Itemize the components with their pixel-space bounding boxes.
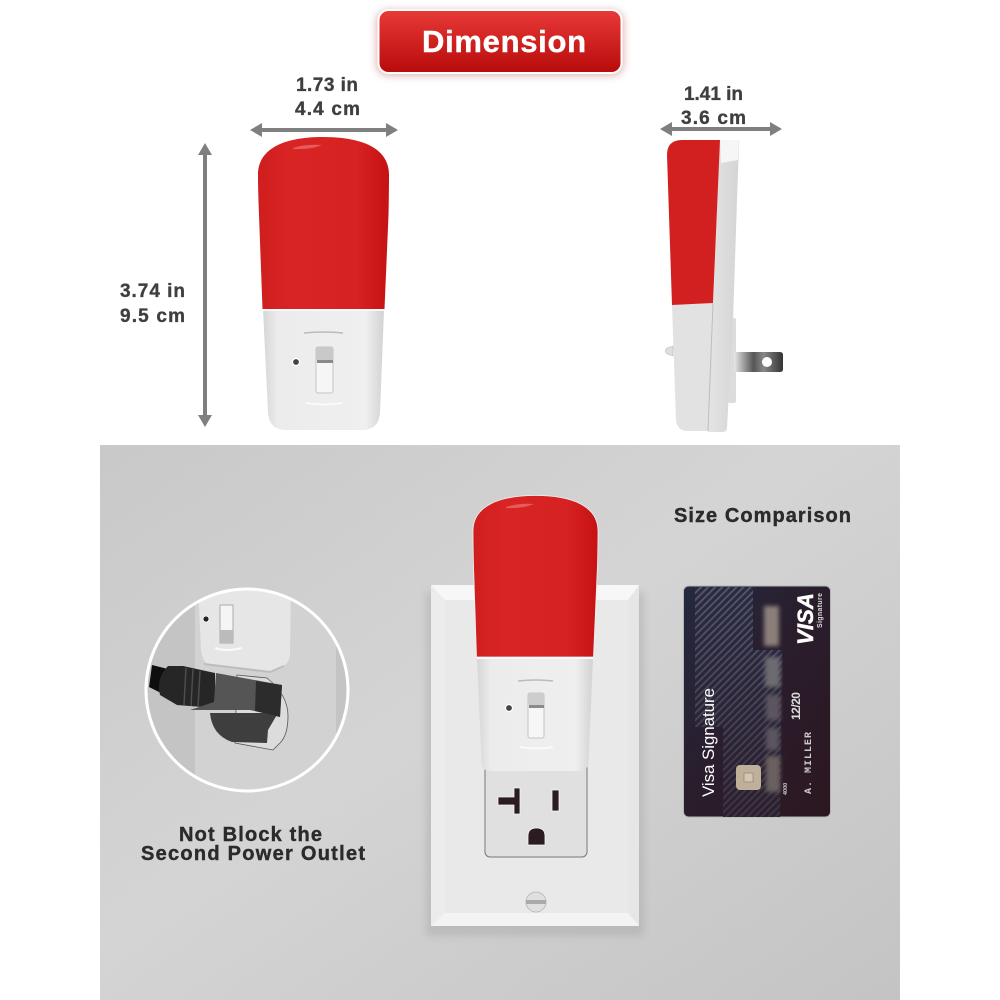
blurred card number <box>764 606 780 792</box>
card chip <box>736 765 761 790</box>
heading: Size Comparison: Size Comparison <box>674 505 851 527</box>
title button: Dimension: Dimension <box>422 24 586 59</box>
caption: Not Block the Second Power Outlet: Second Power Outlet <box>141 843 365 865</box>
credit card <box>684 586 830 817</box>
wall plate with outlet <box>431 585 639 926</box>
credit card: A. MILLER <box>804 732 815 794</box>
width label: 1.73 in / 4.4 cm <box>295 75 360 120</box>
width label: 1.73 in / 4.4 cm: 4.4 cm <box>295 99 360 120</box>
night light: front view <box>258 137 389 430</box>
arrow: front width <box>250 123 398 137</box>
width label: 1.73 in / 4.4 cm: 1.73 in <box>296 75 358 96</box>
caption: Not Block the Second Power Outlet <box>141 824 365 865</box>
credit card: Visa Signature <box>699 688 718 797</box>
caption: Not Block the Second Power Outlet: Not Block the <box>179 824 322 846</box>
photo panel: wall background <box>100 445 900 1000</box>
arrow: side depth <box>660 122 782 136</box>
plate screw <box>526 892 546 912</box>
credit card: Signature <box>817 593 824 628</box>
credit card: VISA <box>793 593 818 645</box>
credit card: 12/20 <box>789 692 803 720</box>
depth label: 1.41 in / 3.6 cm: 3.6 cm <box>681 108 746 129</box>
night light: plugged into outlet <box>473 496 598 771</box>
height label: 3.74 in / 9.5 cm: 9.5 cm <box>120 306 185 327</box>
title button: Dimension <box>376 10 624 76</box>
height label: 3.74 in / 9.5 cm: 3.74 in <box>120 281 185 302</box>
inset circle: second outlet detail <box>140 585 355 800</box>
height label: 3.74 in / 9.5 cm <box>120 281 185 327</box>
outlet face <box>485 745 587 857</box>
night light: side view <box>666 140 783 432</box>
arrow: height <box>198 143 212 427</box>
wall plate shadow <box>426 592 644 936</box>
depth label: 1.41 in / 3.6 cm: 1.41 in <box>684 84 743 105</box>
credit card: 4000 <box>783 783 789 795</box>
depth label: 1.41 in / 3.6 cm <box>681 84 746 129</box>
